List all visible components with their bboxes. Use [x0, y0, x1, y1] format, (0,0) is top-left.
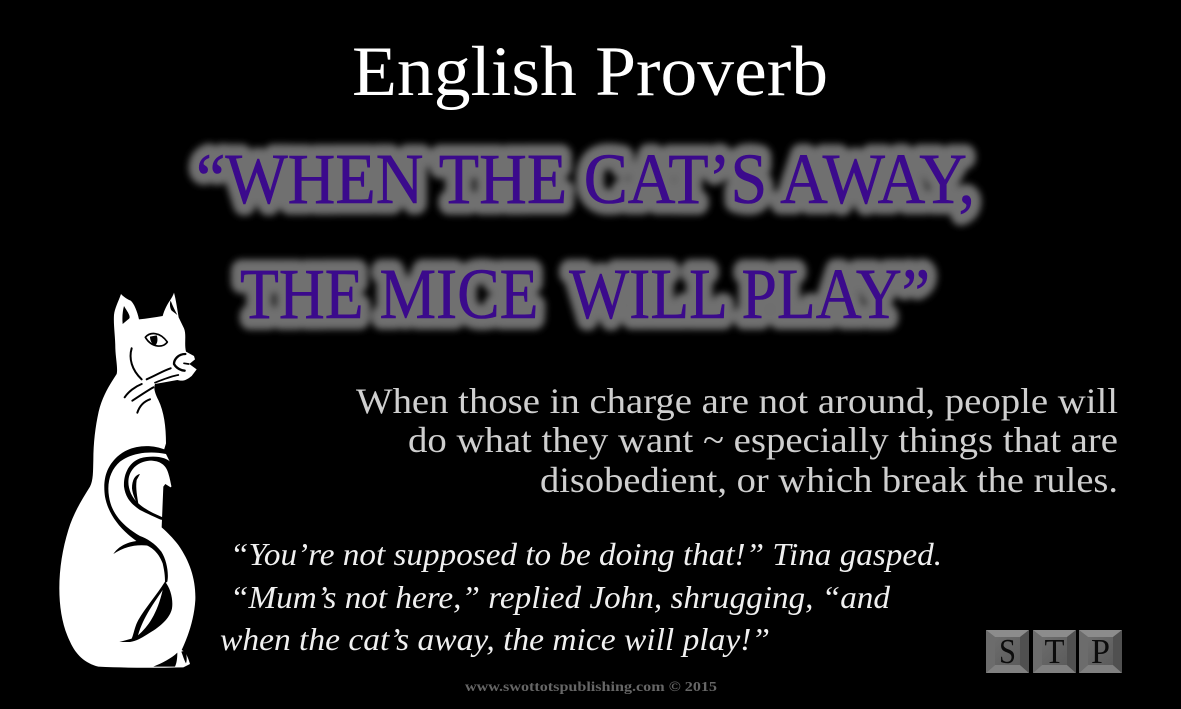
- icon: white cat: [59, 293, 197, 668]
- tile P: P: [1091, 632, 1110, 671]
- explanation line 2: do what they want ~ especially things that are: [408, 420, 1118, 460]
- tile T: T: [1044, 632, 1064, 671]
- title: English Proverb: [352, 33, 828, 111]
- headline glow: [196, 139, 975, 334]
- headline glow: THE MICE WILL PLAY”: [240, 254, 930, 334]
- explanation text: [356, 381, 1118, 500]
- footer credit: www.swottotspublishing.com © 2015: [465, 679, 717, 694]
- explanation line 1: When those in charge are not around, people will: [356, 381, 1118, 421]
- haunch line: [113, 541, 148, 554]
- dialogue line 3: when the cat’s away, the mice will play!”: [220, 621, 770, 657]
- tail tip lines: [153, 651, 187, 667]
- STP logo: [986, 630, 1122, 673]
- headline line 1: “WHEN THE CAT’S AWAY,: [196, 139, 975, 219]
- tail outer line: [104, 446, 168, 583]
- dialogue line 2: “Mum’s not here,” replied John, shrugging, “and: [230, 579, 891, 615]
- tile S: S: [999, 632, 1016, 671]
- back line: [132, 474, 140, 506]
- tail inner line: [124, 457, 175, 520]
- leg highlight: [138, 590, 163, 635]
- cat line work: [104, 301, 189, 667]
- headline glow: “WHEN THE CAT’S AWAY,: [196, 139, 975, 219]
- example dialogue: [220, 536, 942, 657]
- leg wedge: [119, 582, 172, 642]
- proverb headline: [196, 139, 975, 334]
- explanation line 3: disobedient, or which break the rules.: [540, 460, 1118, 500]
- headline line 2: THE MICE WILL PLAY”: [240, 254, 930, 334]
- dialogue line 1: “You’re not supposed to be doing that!” Tina gasped.: [230, 536, 942, 572]
